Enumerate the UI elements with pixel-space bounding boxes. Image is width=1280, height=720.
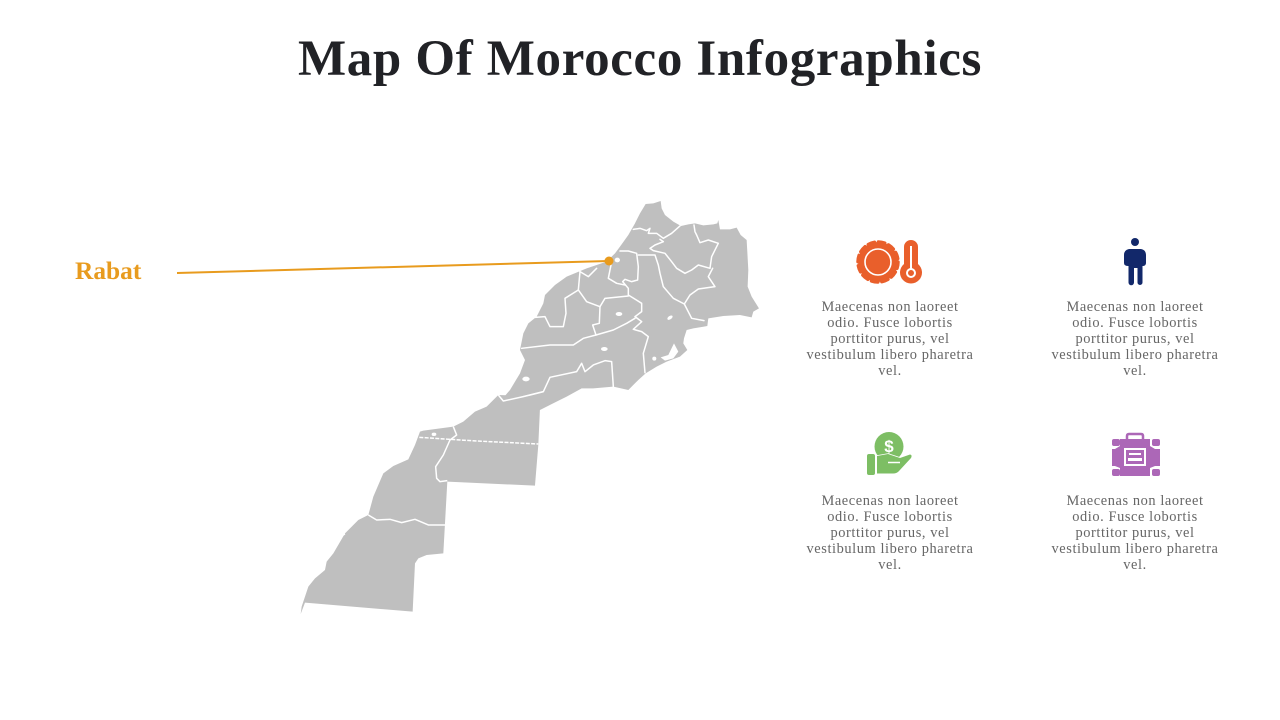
text block: odio. Fusce lobortis [1072, 315, 1198, 331]
icon: hand holding dollar coin: $ [884, 437, 894, 456]
text block [1052, 299, 1218, 379]
icon: sun and thermometer [856, 240, 922, 284]
text block: porttitor purus, vel [1075, 331, 1195, 347]
text block [1052, 493, 1218, 573]
text block: vestibulum libero pharetra [1052, 541, 1218, 557]
leader line to Rabat [177, 256, 614, 273]
icon: person [1124, 238, 1146, 286]
text block: porttitor purus, vel [830, 525, 950, 541]
text block: Maecenas non laoreet [1066, 299, 1204, 315]
title: Map Of Morocco Infographics [298, 31, 982, 87]
text block: odio. Fusce lobortis [1072, 509, 1198, 525]
panel: tourism [1052, 432, 1218, 573]
text block: vel. [878, 557, 902, 573]
text block [806, 299, 973, 379]
text block: Maecenas non laoreet [1066, 493, 1204, 509]
text block [806, 493, 973, 573]
text block: vel. [1123, 557, 1147, 573]
icon: hand holding dollar coin [867, 432, 912, 475]
icon: suitcase [1112, 432, 1160, 476]
text block: vestibulum libero pharetra [807, 541, 973, 557]
southern regions [301, 392, 543, 614]
panel: economy [806, 432, 973, 573]
text block: Maecenas non laoreet [821, 493, 959, 509]
panel: climate [806, 240, 973, 379]
text block: odio. Fusce lobortis [827, 315, 953, 331]
label: Rabat: Rabat [75, 257, 141, 285]
text block: porttitor purus, vel [830, 331, 950, 347]
panel: population [1052, 238, 1218, 379]
text block: vel. [878, 363, 902, 379]
text block: vestibulum libero pharetra [807, 347, 973, 363]
text block: vestibulum libero pharetra [1052, 347, 1218, 363]
text block: odio. Fusce lobortis [827, 509, 953, 525]
text block: vel. [1123, 363, 1147, 379]
text block: porttitor purus, vel [1075, 525, 1195, 541]
northern regions [500, 201, 759, 410]
text block: Maecenas non laoreet [821, 299, 959, 315]
